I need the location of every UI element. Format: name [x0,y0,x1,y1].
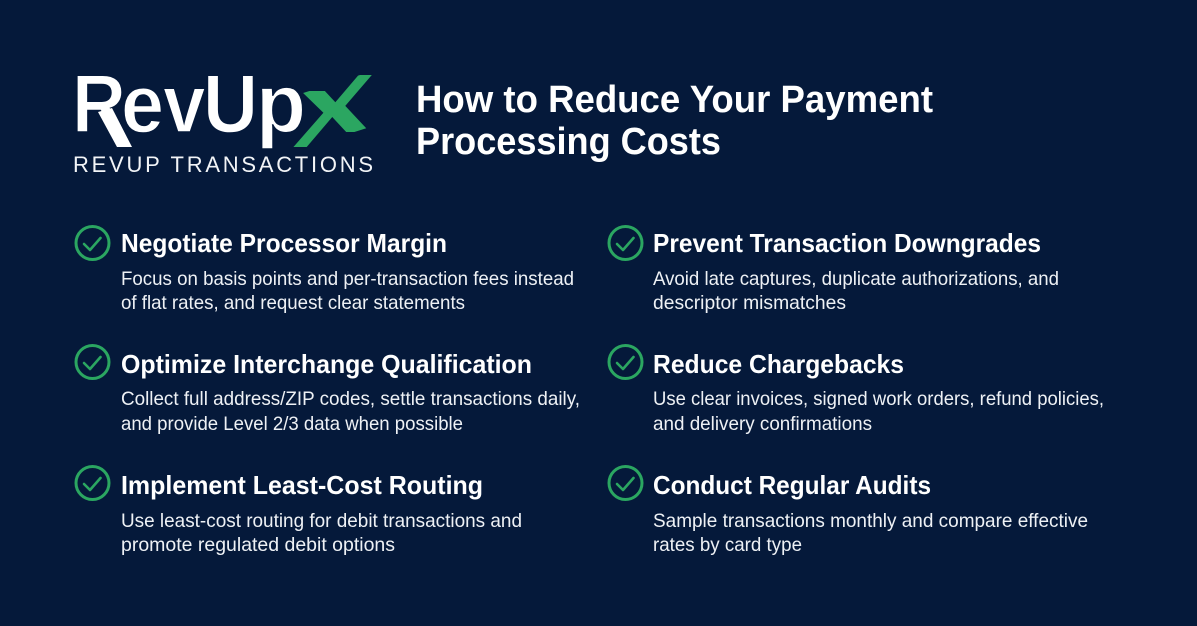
icon: check circle [76,466,109,500]
item: Implement Least-Cost Routing: Use least-cost routing for debit transactions and [121,510,522,532]
item: Negotiate Processor Margin: Focus on basis points and per-transaction fees instead [121,268,574,290]
item: Prevent Transaction Downgrades [609,226,1059,314]
item: Conduct Regular Audits: rates by card type [653,534,802,556]
item: Negotiate Processor Margin: Negotiate Processor Margin [121,228,447,258]
item: Implement Least-Cost Routing [76,466,522,556]
item: Prevent Transaction Downgrades: Avoid late captures, duplicate authorizations, and [653,268,1059,290]
logo wordmark: R [72,57,126,150]
logo wordmark [72,57,306,150]
logo subtitle: REVUP TRANSACTIONS [73,152,373,177]
item: Reduce Chargebacks [609,346,1104,435]
icon: check circle [609,346,642,378]
icon: check circle [76,346,109,378]
item: Negotiate Processor Margin [76,226,574,314]
item: Optimize Interchange Qualification: Collect full address/ZIP codes, settle transactions daily, [121,388,580,410]
item: Reduce Chargebacks: and delivery confirmations [653,413,872,435]
logo wordmark: p [256,57,306,150]
item: Optimize Interchange Qualification: Optimize Interchange Qualification [121,349,532,379]
logo R leg [98,108,132,147]
logo wordmark: e [121,57,164,150]
title: How to Reduce Your Payment [416,79,933,121]
logo [74,75,372,172]
title [416,79,933,163]
item: Optimize Interchange Qualification [76,346,580,435]
icon: check circle [609,226,642,260]
logo wordmark: v [163,57,206,150]
item: Reduce Chargebacks: Reduce Chargebacks [653,349,904,379]
item: Prevent Transaction Downgrades: descriptor mismatches [653,292,846,314]
item: Prevent Transaction Downgrades: Prevent Transaction Downgrades [653,228,1041,258]
icon: check circle [76,226,109,260]
logo green X: X [283,51,383,172]
item: Implement Least-Cost Routing: Implement Least-Cost Routing [121,470,483,500]
item: Conduct Regular Audits: Conduct Regular Audits [653,470,931,500]
infographic canvas [74,75,1102,555]
item: Optimize Interchange Qualification: and provide Level 2/3 data when possible [121,413,463,435]
logo wordmark: U [203,57,258,150]
icon: check circle [609,466,642,500]
item: Conduct Regular Audits [609,466,1088,556]
item: Negotiate Processor Margin: of flat rates, and request clear statements [121,292,465,314]
title: Processing Costs [416,121,721,163]
item: Implement Least-Cost Routing: promote regulated debit options [121,534,395,556]
item: Reduce Chargebacks: Use clear invoices, signed work orders, refund policies, [653,388,1104,410]
item: Conduct Regular Audits: Sample transactions monthly and compare effective [653,510,1088,532]
